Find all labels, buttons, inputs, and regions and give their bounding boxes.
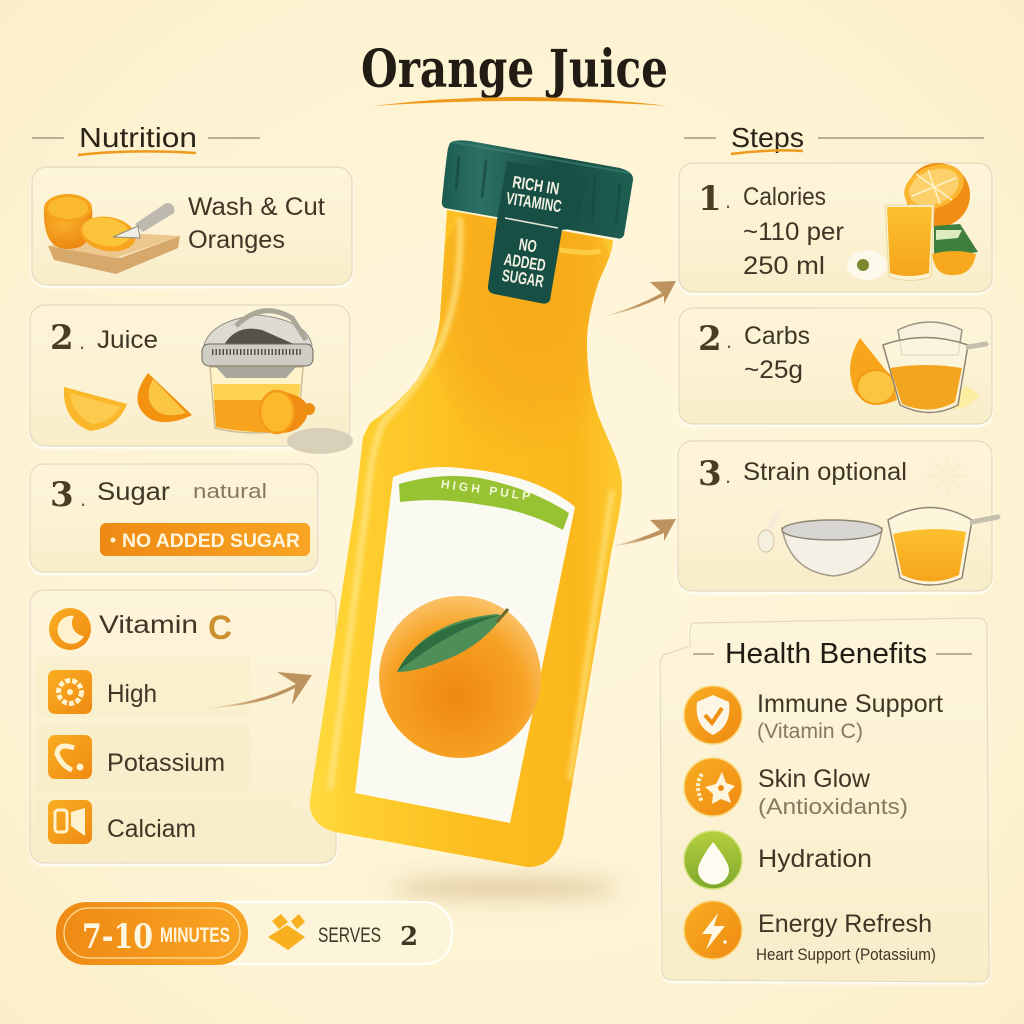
icon: oranges on cutting board bbox=[44, 194, 180, 274]
panel: carbs: 2 bbox=[698, 319, 722, 359]
benefit: immune support bbox=[684, 686, 943, 744]
icon: orange and measuring cups bbox=[850, 322, 986, 412]
panel: calories: 1 bbox=[698, 179, 722, 219]
icon: oranges and glass of juice bbox=[847, 156, 978, 280]
arrow: bottle to calories bbox=[602, 281, 676, 317]
panel: carbs: . bbox=[726, 328, 732, 353]
row: Calcium bbox=[48, 800, 196, 844]
row: High: High bbox=[107, 680, 157, 708]
icon: bowl and strainer bbox=[758, 508, 998, 585]
panel: carbs bbox=[679, 308, 992, 424]
cap tag: RICH IN bbox=[511, 173, 561, 199]
badge: minutes: MINUTES bbox=[160, 924, 230, 947]
panel: wash and cut: Wash & Cut bbox=[188, 193, 325, 221]
heading: Steps bbox=[684, 122, 984, 154]
shadow: juicer bbox=[287, 428, 353, 454]
heading: Steps: Steps bbox=[731, 122, 804, 153]
benefit: hydration: Hydration bbox=[758, 845, 872, 873]
panel: calories: ~110 per bbox=[743, 218, 844, 246]
panel: strain: . bbox=[725, 463, 731, 488]
panel: strain bbox=[678, 441, 998, 591]
arrow: bottle to strain bbox=[612, 519, 676, 546]
bottle body bbox=[310, 210, 622, 867]
benefit: energy refresh bbox=[684, 901, 936, 964]
panel: juice bbox=[30, 305, 353, 454]
panel: sugar: natural bbox=[193, 481, 267, 503]
panel: strain: 3 bbox=[698, 454, 722, 494]
heading: health benefits: Health Benefits bbox=[725, 638, 927, 670]
badge: minutes: 7-10 bbox=[82, 917, 153, 957]
panel: carbs: Carbs bbox=[744, 322, 810, 350]
cap tag: NO bbox=[517, 235, 538, 256]
bottle shadow bbox=[390, 877, 620, 899]
panel: calories: . bbox=[725, 188, 731, 213]
cap tag bbox=[488, 161, 587, 304]
icon: juicer and orange slices bbox=[64, 311, 315, 433]
row: High bbox=[48, 670, 157, 714]
benefit: skin glow: Skin Glow bbox=[758, 765, 871, 793]
bottle label: HIGH PULP bbox=[440, 477, 531, 503]
panel: sugar: Sugar bbox=[97, 478, 170, 506]
panel: sugar: . bbox=[80, 486, 86, 511]
footer pill: time and servings: 2 bbox=[400, 922, 418, 952]
benefit: hydration bbox=[684, 831, 872, 889]
benefit: immune support: (Vitamin C) bbox=[757, 720, 863, 743]
panel: sugar: 3 bbox=[50, 475, 74, 515]
cap tag: SUGAR bbox=[501, 266, 545, 291]
row: Calcium: Calciam bbox=[107, 815, 196, 843]
panel: calories bbox=[679, 156, 992, 292]
cap tag: ADDED bbox=[503, 250, 547, 275]
panel: juice: 2 bbox=[50, 318, 74, 358]
icon: servings bbox=[268, 914, 305, 950]
heading: Nutrition bbox=[32, 122, 260, 155]
panel: strain: Strain optional bbox=[743, 458, 907, 486]
row: Vitamin C bbox=[49, 608, 232, 650]
footer pill: time and servings bbox=[56, 902, 452, 965]
panel: sugar bbox=[30, 464, 318, 572]
bottle cap bbox=[442, 140, 633, 304]
benefit: immune support: Immune Support bbox=[757, 690, 943, 718]
title: Orange Juice bbox=[361, 39, 668, 100]
row: Vitamin C: C bbox=[208, 609, 232, 647]
benefit: skin glow bbox=[684, 758, 908, 819]
row: Potassium bbox=[48, 735, 225, 779]
heading: Nutrition: Nutrition bbox=[79, 122, 197, 153]
panel: calories: Calories bbox=[743, 183, 826, 211]
panel: wash and cut: Oranges bbox=[188, 226, 285, 254]
panel: calories: 250 ml bbox=[743, 252, 825, 280]
panel: health benefits bbox=[660, 618, 989, 982]
panel: vitamins and minerals bbox=[30, 590, 336, 863]
panel: juice: . bbox=[79, 329, 85, 354]
benefit: skin glow: (Antioxidants) bbox=[758, 794, 908, 819]
panel: carbs: ~25g bbox=[744, 356, 803, 384]
bottle label bbox=[355, 467, 575, 823]
panel: juice: Juice bbox=[97, 326, 158, 354]
footer pill: time and servings: SERVES bbox=[318, 924, 381, 947]
juice bottle bbox=[310, 140, 633, 867]
panel: wash and cut bbox=[32, 167, 352, 285]
cap tag: VITAMINC bbox=[505, 189, 563, 216]
badge: no added sugar: NO ADDED SUGAR bbox=[122, 531, 300, 552]
orange illustration bbox=[379, 596, 541, 758]
benefit: energy refresh: Energy Refresh bbox=[758, 910, 932, 938]
row: Vitamin C: Vitamin bbox=[99, 611, 198, 639]
badge: no added sugar bbox=[100, 523, 310, 556]
arrow: nutrition to bottle bbox=[208, 672, 312, 708]
benefit: energy refresh: Heart Support (Potassium) bbox=[756, 945, 936, 964]
row: Potassium: Potassium bbox=[107, 749, 225, 777]
badge: minutes bbox=[56, 902, 248, 965]
